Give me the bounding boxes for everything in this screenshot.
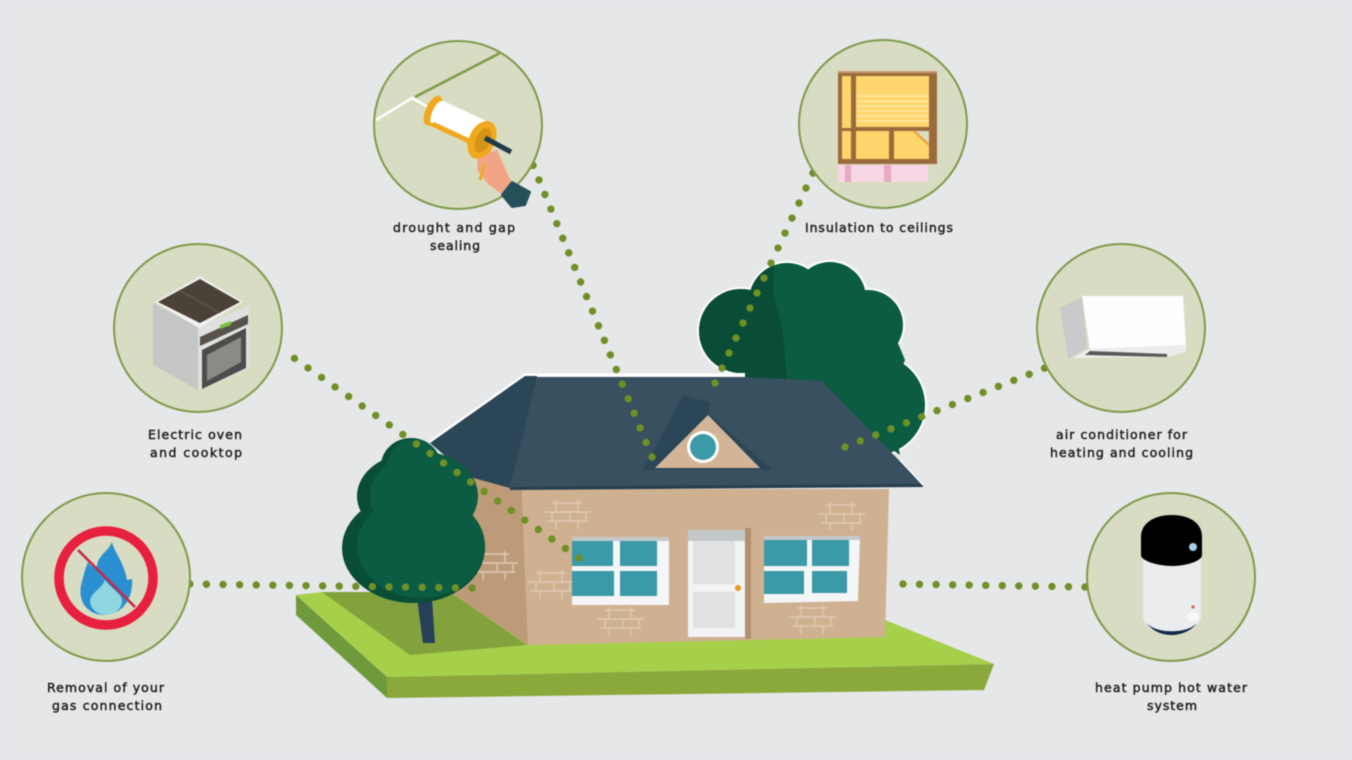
house [430,375,923,645]
right window [764,536,860,603]
label [148,427,242,460]
icon: wall unit [1060,296,1186,359]
gap line [376,98,428,120]
dotted connector: hot water [903,584,1086,587]
icon: oven [153,276,249,391]
label: and cooktop [150,445,242,460]
brick patches [471,500,865,636]
icon: water tank [1141,515,1202,635]
left window [572,537,669,605]
dotted connector: oven [281,349,579,558]
label: system [1147,698,1197,713]
front wall [522,489,889,645]
label [47,680,165,713]
label: sealing [430,238,480,253]
panel: air conditioner [1037,244,1205,460]
lawn base [296,592,994,698]
label [1050,427,1193,460]
label: Electric oven [148,427,242,442]
label [393,220,515,253]
icon: caulking gun [416,93,530,207]
panel: ceiling insulation [799,40,967,235]
dotted connector: air conditioner [845,368,1046,447]
dormer [643,396,772,470]
label: gas connection [52,698,162,713]
panel: gas removal [22,493,190,713]
panel: draught and gap sealing [374,41,542,253]
dotted connector: gas [189,584,472,588]
label: heat pump hot water [1095,680,1248,695]
icon: crossed-out flame [59,531,153,625]
dotted connector: sealing [532,164,652,457]
label: Insulation to ceilings [805,220,953,235]
panel: heat pump hot water [1087,493,1255,713]
side wall [450,477,528,645]
gap line green [415,53,500,97]
tree behind house [699,262,925,455]
roof [430,375,923,490]
label: heating and cooling [1050,445,1193,460]
label: drought and gap [393,220,515,235]
label [1095,680,1248,713]
dotted connector: insulation [715,172,814,383]
panel: electric oven [114,244,282,460]
front tree [342,438,485,643]
door [688,528,751,639]
label: air conditioner for [1056,427,1188,442]
icon: insulated ceiling [838,71,937,182]
label: Removal of your [47,680,165,695]
